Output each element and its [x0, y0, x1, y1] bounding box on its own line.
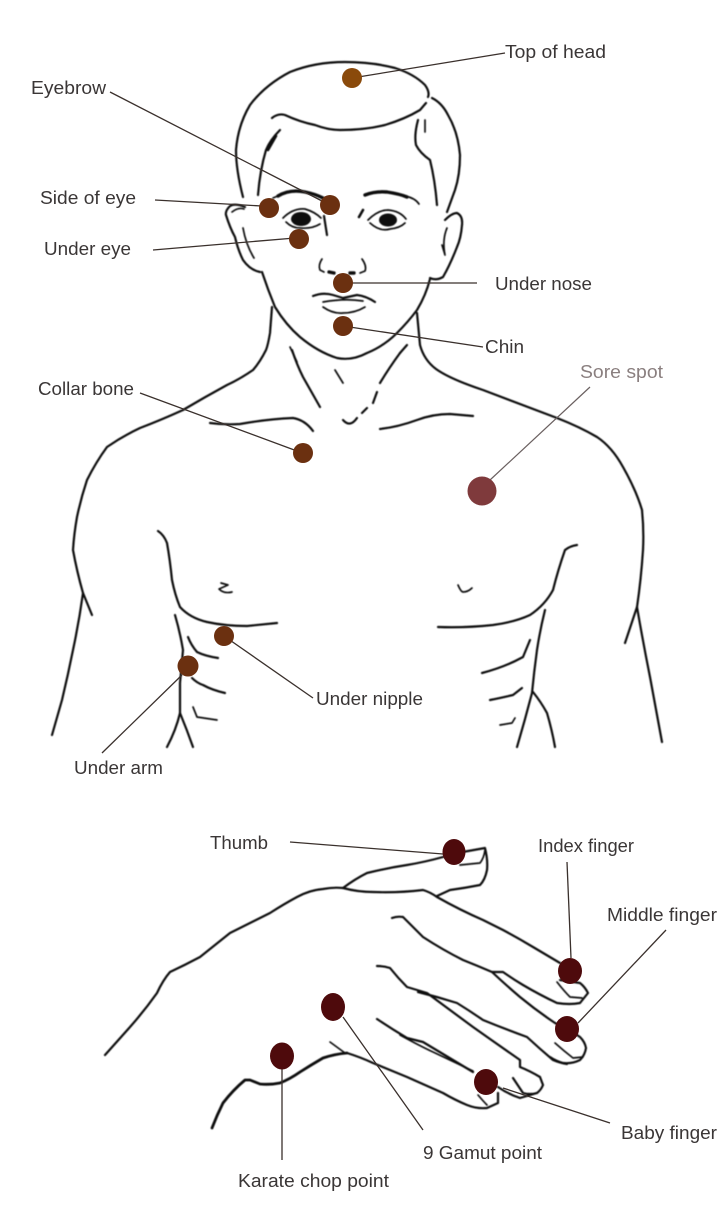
- leader line: [153, 238, 295, 250]
- callout: 9 gamut point: [321, 993, 542, 1163]
- label: Side of eye: [40, 188, 136, 208]
- point: [333, 316, 353, 336]
- callout: side of eye: [40, 188, 279, 218]
- callout: under arm: [74, 656, 198, 778]
- callout: under nose: [333, 273, 592, 294]
- label: Under nipple: [316, 689, 423, 709]
- ears: [226, 205, 462, 279]
- leader line: [343, 326, 483, 347]
- leader line: [352, 53, 505, 78]
- point: [333, 273, 353, 293]
- callout: middle finger: [555, 905, 717, 1042]
- leader line: [224, 636, 313, 698]
- leader line: [110, 92, 322, 201]
- leader line: [567, 862, 571, 958]
- callout: karate chop point: [238, 1042, 389, 1191]
- callout: eyebrow: [31, 78, 340, 215]
- head and hair: [236, 62, 460, 359]
- leader line: [343, 1017, 423, 1130]
- label: Thumb: [210, 833, 268, 853]
- point: [468, 476, 496, 506]
- point: [321, 993, 345, 1021]
- leader line: [343, 282, 477, 284]
- callout: chin: [333, 316, 524, 357]
- point: [289, 229, 309, 249]
- point: [555, 1016, 579, 1042]
- callout: sore spot: [468, 362, 663, 506]
- leader line: [503, 1088, 610, 1123]
- label: Middle finger: [607, 905, 717, 925]
- leader line: [290, 842, 443, 854]
- callout: top of head: [342, 42, 606, 88]
- body line drawing: [52, 62, 662, 1128]
- label: Sore spot: [580, 362, 663, 382]
- callout: thumb: [210, 833, 466, 865]
- point: [214, 626, 234, 646]
- leader line: [140, 393, 297, 451]
- point: [178, 656, 198, 676]
- leader line: [102, 675, 182, 753]
- label: Karate chop point: [238, 1171, 389, 1191]
- point: [558, 958, 582, 984]
- label: Under eye: [44, 239, 131, 259]
- callout: collar bone: [38, 379, 313, 463]
- label: Eyebrow: [31, 78, 107, 98]
- face features: [273, 191, 419, 313]
- leader line: [155, 200, 262, 206]
- label: Collar bone: [38, 379, 134, 399]
- point: [342, 68, 362, 88]
- label: Top of head: [505, 42, 606, 62]
- callout: under eye: [44, 229, 309, 259]
- point: [474, 1069, 498, 1095]
- leader line: [281, 1068, 283, 1160]
- label: Index finger: [538, 836, 634, 856]
- neck and shoulders: [52, 307, 662, 742]
- point: [293, 443, 313, 463]
- label: Chin: [485, 337, 524, 357]
- label: Under arm: [74, 758, 163, 778]
- label: 9 Gamut point: [423, 1143, 542, 1163]
- leader line: [490, 387, 590, 480]
- hands: [105, 848, 588, 1128]
- chest and ribs: [158, 531, 577, 747]
- point: [320, 195, 340, 215]
- point: [442, 839, 466, 865]
- point: [259, 198, 279, 218]
- callout: under nipple: [214, 626, 423, 709]
- point: [270, 1042, 294, 1070]
- leader line: [578, 930, 666, 1023]
- callout: index finger: [538, 836, 634, 984]
- callout: baby finger: [474, 1069, 717, 1143]
- label: Baby finger: [621, 1123, 717, 1143]
- label: Under nose: [495, 274, 592, 294]
